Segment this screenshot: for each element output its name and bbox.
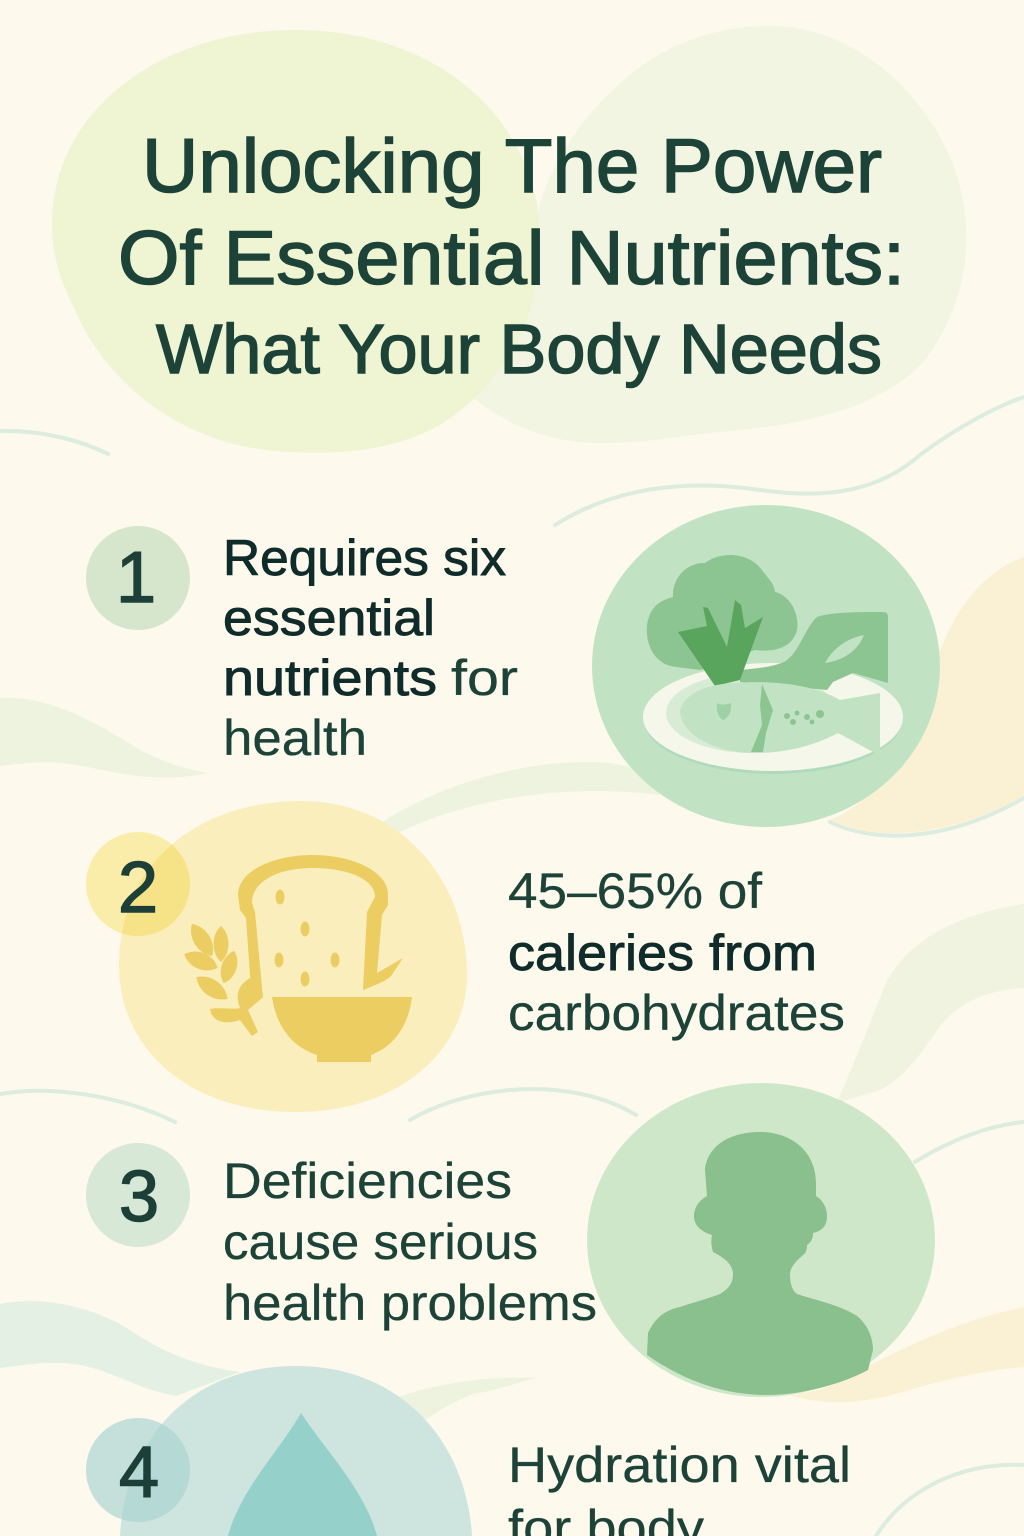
item 2: text: 45–65% of bbox=[508, 863, 762, 919]
item 2: text: caleries from bbox=[508, 925, 817, 981]
item 3: text: cause serious bbox=[223, 1214, 538, 1270]
item 3: text: health problems bbox=[223, 1275, 597, 1331]
bread crust bbox=[238, 855, 403, 998]
item 2: text bbox=[508, 863, 845, 1041]
title: Unlocking The Power bbox=[142, 124, 882, 209]
item 4: text: Hydration vital bbox=[508, 1437, 851, 1493]
item 2: text: carbohydrates bbox=[508, 985, 845, 1041]
item 1: text: for bbox=[451, 650, 518, 706]
fish bbox=[680, 682, 880, 757]
droplet bbox=[228, 1413, 377, 1536]
item 3: number badge bbox=[86, 1143, 190, 1247]
item 4: number badge bbox=[86, 1418, 190, 1522]
item 2: number badge: 2 bbox=[118, 848, 158, 928]
bowl bbox=[272, 997, 412, 1062]
item 3: person icon bbox=[587, 1083, 935, 1397]
item 1: text: Requires six bbox=[223, 530, 506, 586]
item 2: food circle with icon bbox=[119, 801, 467, 1112]
item 3: text: Deficiencies bbox=[223, 1153, 512, 1209]
plate bbox=[644, 666, 902, 774]
leaf bbox=[740, 612, 888, 690]
item 1: text: essential bbox=[223, 590, 435, 646]
title bbox=[118, 124, 905, 388]
broccoli stem bbox=[678, 600, 763, 686]
item 4: droplet circle bbox=[120, 1366, 472, 1536]
item 1: food icon bbox=[592, 505, 940, 827]
item 3: text bbox=[223, 1153, 597, 1331]
title: Of Essential Nutrients: bbox=[118, 216, 905, 301]
broccoli head bbox=[647, 555, 798, 670]
item 1: text bbox=[223, 530, 518, 766]
item 4: text bbox=[508, 1437, 851, 1536]
item 1: text: health bbox=[223, 710, 367, 766]
item 1: text: nutrients bbox=[223, 650, 437, 706]
item 1: number badge bbox=[86, 526, 190, 630]
item 3: number badge: 3 bbox=[119, 1157, 159, 1237]
item 1: number badge: 1 bbox=[116, 538, 156, 618]
wheat sprig bbox=[181, 920, 262, 1036]
item 2: number badge bbox=[86, 832, 190, 936]
item 4: number badge: 4 bbox=[119, 1433, 159, 1513]
title: What Your Body Needs bbox=[156, 310, 882, 388]
